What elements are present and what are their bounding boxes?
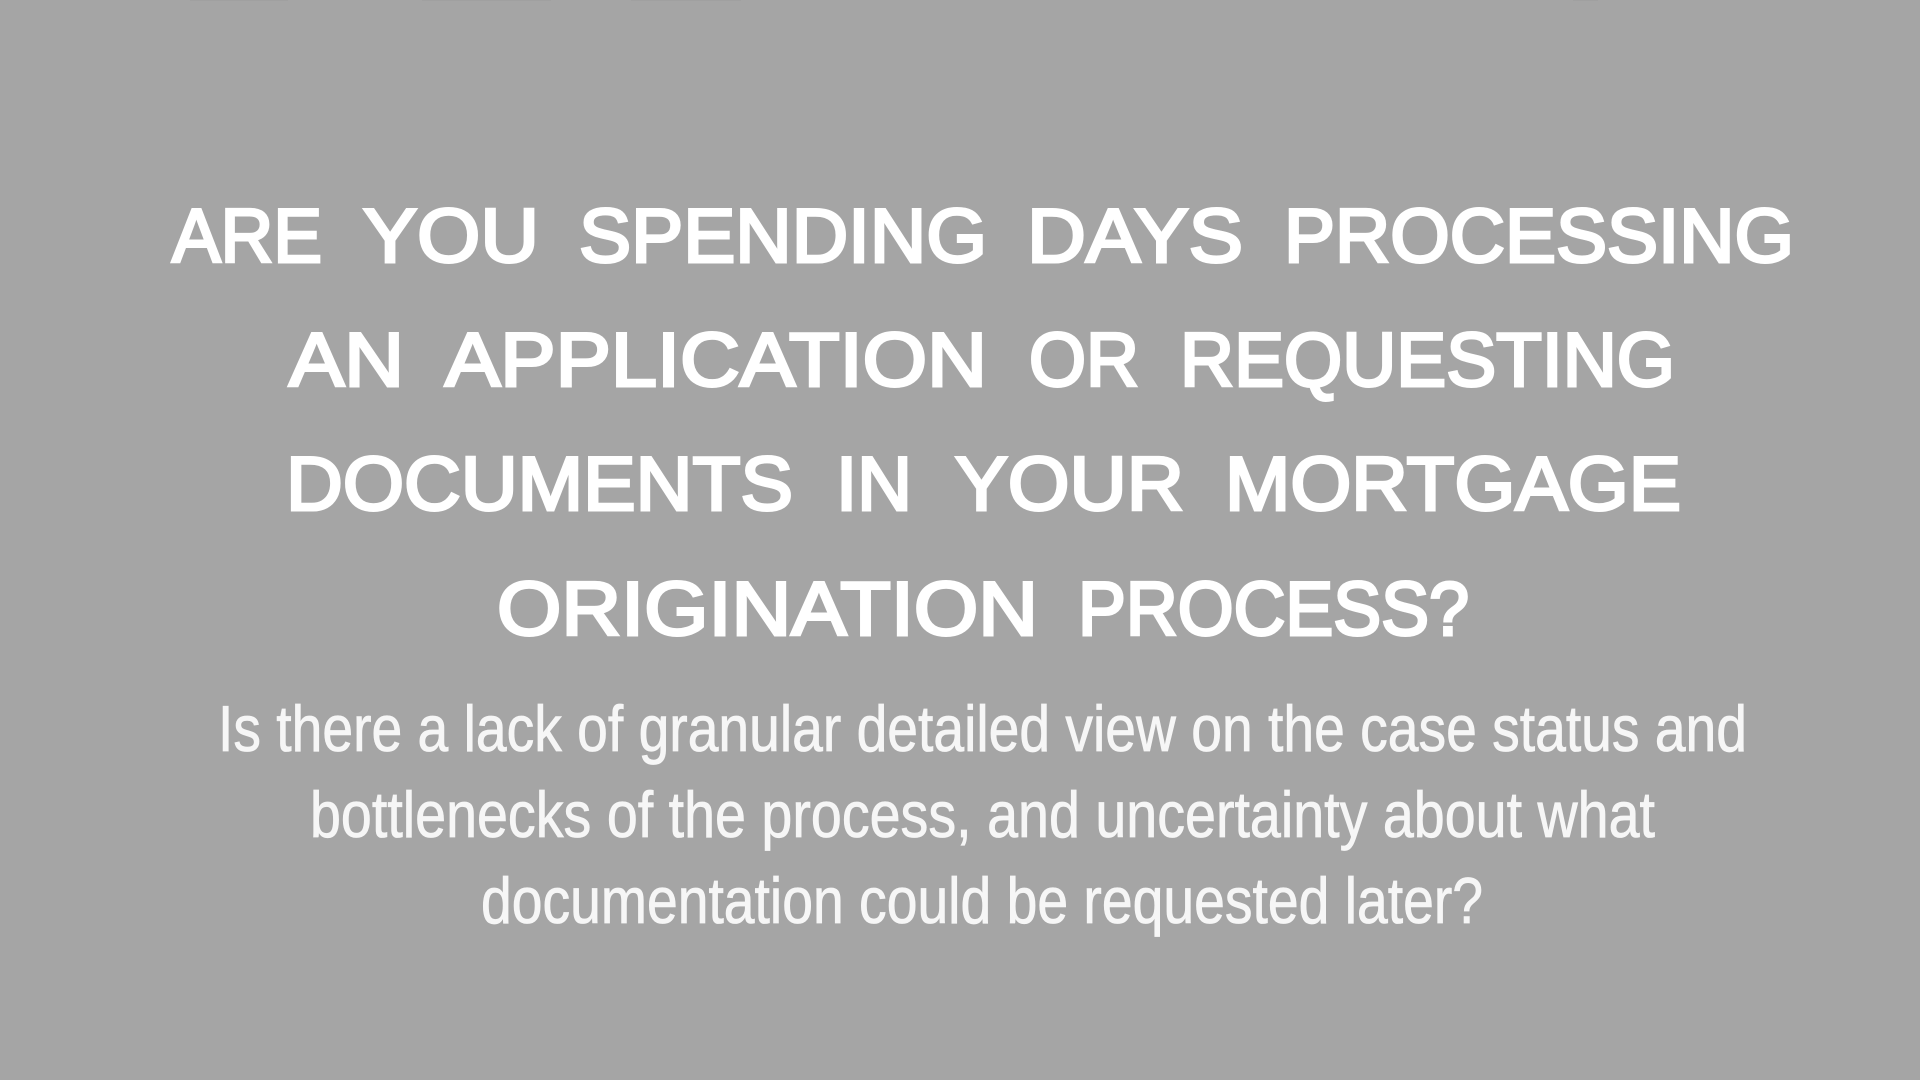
body text xyxy=(218,692,1747,937)
heading: SPENDING xyxy=(579,194,987,279)
heading: APPLICATION xyxy=(445,318,987,403)
heading: DAYS xyxy=(1027,194,1243,279)
heading: AN xyxy=(289,318,404,403)
heading xyxy=(172,194,1794,652)
heading: ARE xyxy=(172,194,322,279)
heading: PROCESS? xyxy=(1078,567,1469,652)
heading: PROCESSING xyxy=(1284,194,1794,279)
heading: IN xyxy=(836,442,912,527)
body text: documentation could be requested later? xyxy=(481,864,1483,937)
heading: DOCUMENTS xyxy=(286,442,793,527)
heading: REQUESTING xyxy=(1180,318,1675,403)
heading: MORTGAGE xyxy=(1225,442,1681,527)
heading: YOU xyxy=(363,194,539,279)
body text: bottlenecks of the process, and uncertainty about what xyxy=(310,778,1655,851)
heading: ORIGINATION xyxy=(497,567,1038,652)
heading: OR xyxy=(1029,318,1139,403)
heading: YOUR xyxy=(955,442,1184,527)
